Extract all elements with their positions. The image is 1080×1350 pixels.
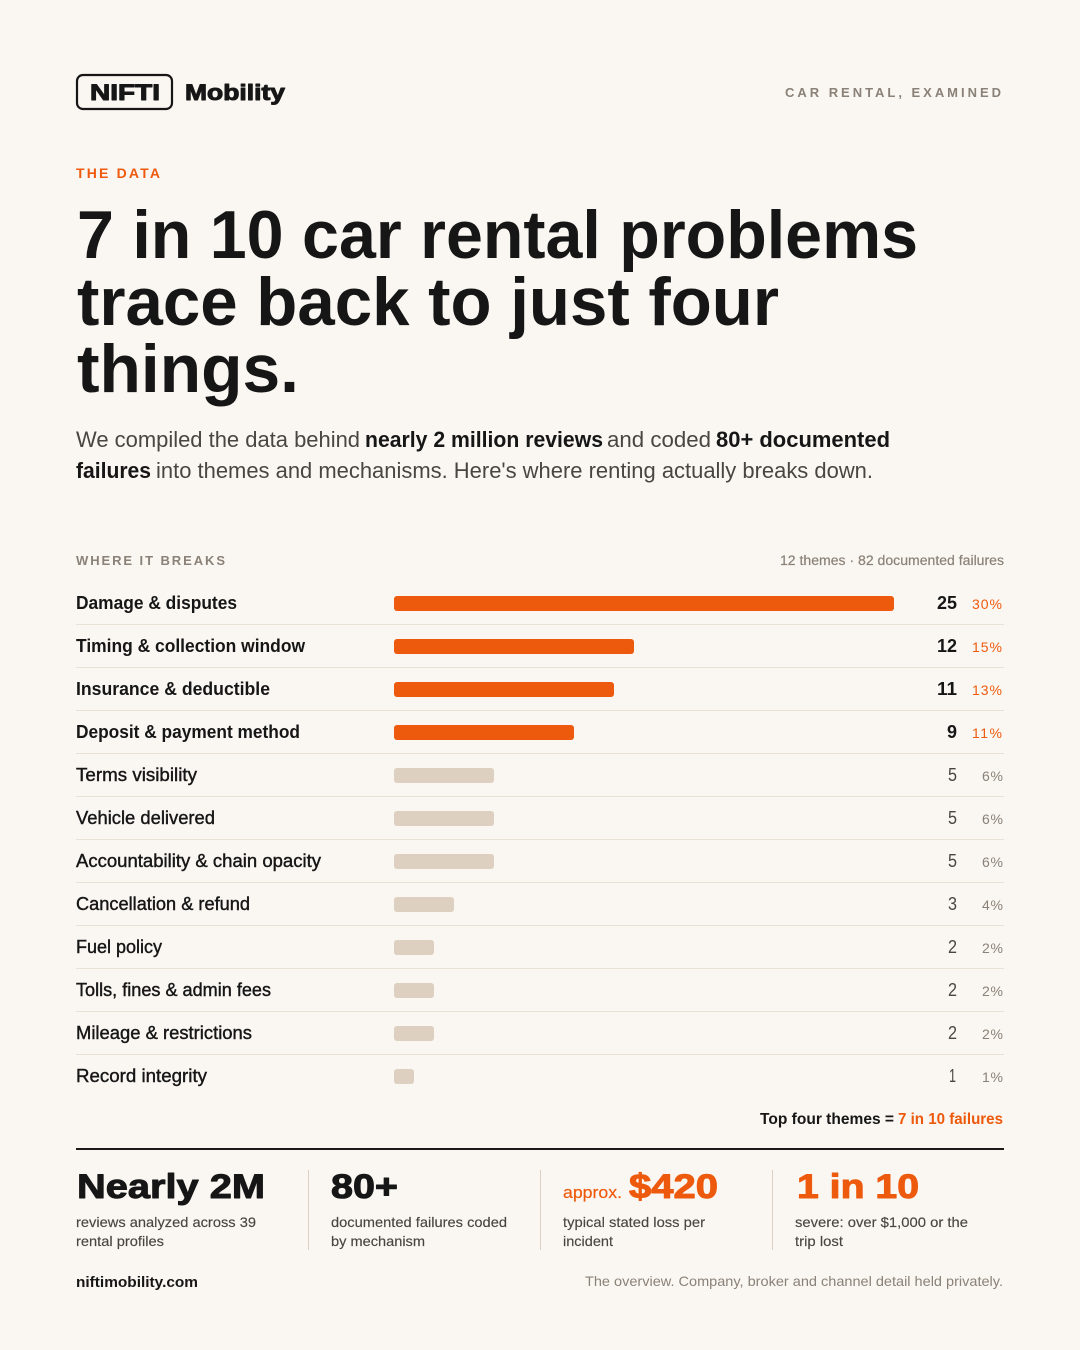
- row: insurance: Insurance & deductible: [76, 679, 270, 699]
- title: things.: [77, 331, 299, 407]
- row: deposit: Deposit & payment method: [76, 722, 300, 742]
- stats row: [76, 1168, 968, 1250]
- row: cancellation: Cancellation & refund: [76, 894, 250, 914]
- stat: failures: 80+: [331, 1168, 398, 1206]
- chart summary: 7 in 10 failures: [898, 1111, 1003, 1128]
- row: record: [76, 1066, 1003, 1086]
- row: mileage: 2: [948, 1023, 957, 1043]
- footer: url: niftimobility.com: [76, 1274, 198, 1291]
- stat: typical loss: typical stated loss per: [563, 1214, 705, 1230]
- row: cancellation: 4%: [982, 897, 1003, 913]
- stat: typical loss: approx.: [563, 1183, 622, 1202]
- row: damage: 30%: [972, 596, 1002, 612]
- row: terms: 6%: [982, 768, 1003, 784]
- row: accountability: Accountability & chain opacity: [76, 851, 321, 871]
- stat: severe: severe: over $1,000 or the: [795, 1214, 968, 1230]
- row: deposit: 9: [947, 722, 957, 742]
- row: tolls: 2: [948, 980, 957, 1000]
- row: terms: 5: [948, 765, 957, 785]
- chart note: 12 themes · 82 documented failures: [780, 553, 1004, 568]
- row: mileage: [76, 1023, 1003, 1043]
- chart summary: Top four themes =: [760, 1111, 894, 1128]
- intro text: and coded: [607, 427, 711, 452]
- intro text: 80+ documented: [716, 427, 890, 452]
- row: damage: Damage & disputes: [76, 593, 237, 613]
- stat: reviews: rental profiles: [76, 1233, 164, 1249]
- row: terms: Terms visibility: [76, 765, 197, 785]
- row: vehicle: 6%: [982, 811, 1003, 827]
- logo: NIFTI: [90, 80, 160, 105]
- footer: note: The overview. Company, broker and channel detail held privately.: [585, 1273, 1003, 1289]
- title: trace back to just four: [77, 264, 779, 340]
- row: accountability: 6%: [982, 854, 1003, 870]
- row: timing: [76, 636, 1002, 656]
- row: mileage: Mileage & restrictions: [76, 1023, 252, 1043]
- intro text: [76, 427, 890, 483]
- intro text: We compiled the data behind: [76, 427, 360, 452]
- intro text: into themes and mechanisms. Here's where renting actually breaks down.: [156, 458, 873, 483]
- stat: typical loss: $420: [629, 1168, 718, 1206]
- chart summary: [760, 1111, 1003, 1128]
- row: vehicle: [76, 808, 1003, 828]
- row: accountability: 5: [948, 851, 957, 871]
- stat: severe: trip lost: [795, 1233, 843, 1249]
- stat: severe: [795, 1168, 968, 1249]
- row: cancellation: [76, 894, 1003, 914]
- stat: reviews: Nearly 2M: [77, 1168, 265, 1206]
- row: damage: 25: [937, 593, 957, 613]
- chart heading: WHERE IT BREAKS: [76, 553, 225, 568]
- row: fuel: 2: [948, 937, 957, 957]
- stat: severe: 1 in 10: [797, 1168, 919, 1206]
- stat: failures: documented failures coded: [331, 1214, 507, 1230]
- logo: Mobility: [185, 80, 286, 105]
- intro text: failures: [76, 458, 151, 483]
- row: cancellation: 3: [948, 894, 957, 914]
- row: insurance: 11: [937, 679, 957, 699]
- title: [77, 197, 918, 407]
- bar chart: themes: [76, 593, 1004, 1086]
- eyebrow: THE DATA: [76, 165, 160, 181]
- stat: typical loss: incident: [563, 1233, 613, 1249]
- intro text: nearly 2 million reviews: [365, 427, 603, 452]
- tagline: CAR RENTAL, EXAMINED: [785, 85, 1001, 100]
- row: accountability: [76, 851, 1003, 871]
- row: deposit: 11%: [972, 725, 1002, 741]
- stat: failures: by mechanism: [331, 1233, 425, 1249]
- row: deposit: [76, 722, 1002, 742]
- row: fuel: Fuel policy: [76, 937, 162, 957]
- stat: failures: [331, 1168, 507, 1249]
- row: record: Record integrity: [76, 1066, 207, 1086]
- row: fuel: 2%: [982, 940, 1003, 956]
- row: timing: Timing & collection window: [76, 636, 306, 656]
- row: timing: 12: [937, 636, 957, 656]
- row: tolls: [76, 980, 1003, 1000]
- row: vehicle: 5: [948, 808, 957, 828]
- row: record: 1: [949, 1066, 956, 1086]
- row: timing: 15%: [972, 639, 1002, 655]
- logo: [77, 75, 286, 109]
- row: terms: [76, 765, 1003, 785]
- stat: reviews: reviews analyzed across 39: [76, 1214, 256, 1230]
- row: fuel: [76, 937, 1003, 957]
- row: damage: [76, 593, 1002, 613]
- row: tolls: 2%: [982, 983, 1003, 999]
- stat: typical loss: [563, 1168, 718, 1249]
- rule: [76, 1148, 1004, 1150]
- row: mileage: 2%: [982, 1026, 1003, 1042]
- title: 7 in 10 car rental problems: [77, 197, 918, 273]
- row: insurance: 13%: [972, 682, 1002, 698]
- row: record: 1%: [982, 1069, 1003, 1085]
- row: tolls: Tolls, fines & admin fees: [76, 980, 271, 1000]
- row: vehicle: Vehicle delivered: [76, 808, 215, 828]
- row: insurance: [76, 679, 1002, 699]
- stat: reviews: [76, 1168, 265, 1249]
